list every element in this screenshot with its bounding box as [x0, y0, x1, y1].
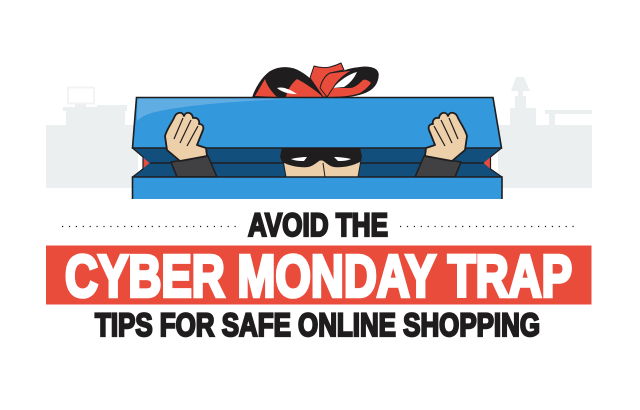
thief face and mask: [280, 147, 362, 177]
box lower front: [132, 177, 502, 199]
box crease: [150, 162, 484, 164]
background: desk with computer silhouette: [46, 88, 138, 188]
box side notches: [132, 148, 502, 177]
left hand: [165, 113, 207, 161]
dotted rule left: [62, 226, 237, 228]
red inner flaps: [142, 157, 150, 169]
box lid: [132, 98, 502, 148]
box interior: [132, 148, 502, 177]
left sleeve: [171, 156, 217, 177]
lid highlight: [137, 98, 305, 121]
icon: gift box with thief inside: [132, 63, 502, 199]
right sleeve: [415, 156, 461, 177]
heading: avoid the: AVOID THE: [248, 207, 388, 243]
right hand: [425, 113, 467, 161]
title banner: [46, 246, 592, 304]
ribbon bow: [253, 63, 378, 98]
dotted rule right: [400, 226, 576, 228]
background: shelf with lamp silhouette: [498, 77, 592, 188]
subtitle: TIPS FOR SAFE ONLINE SHOPPING: [95, 307, 540, 343]
